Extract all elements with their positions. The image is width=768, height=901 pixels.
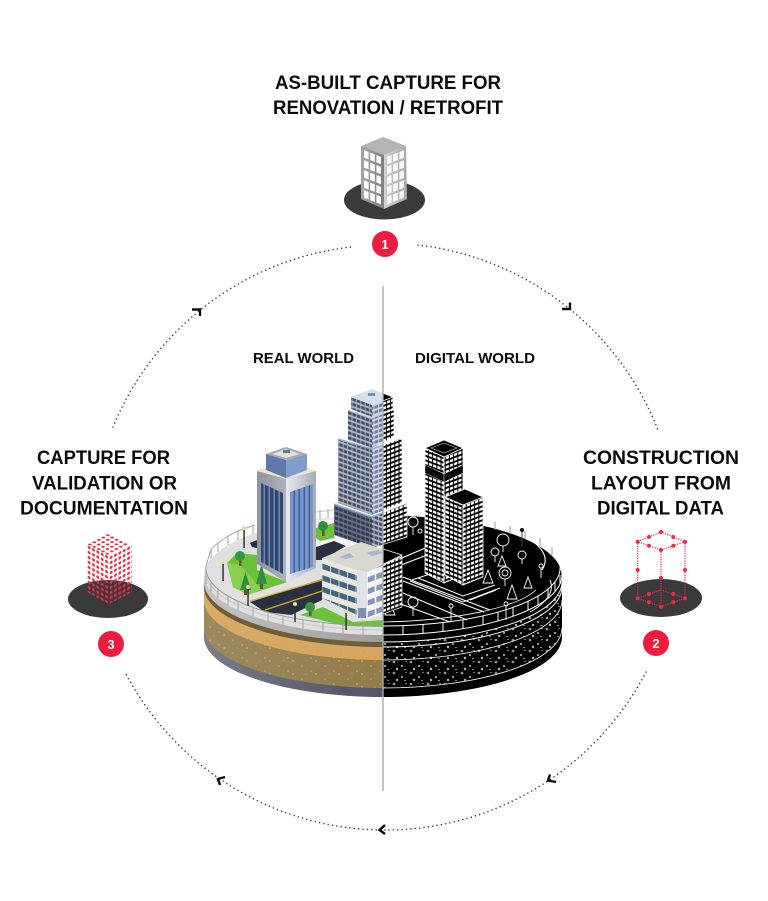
ground surface <box>204 515 382 635</box>
illustration: digital world half of city disc <box>384 394 562 697</box>
badge 3: 3 <box>107 637 115 652</box>
illustration: real world half of city disc <box>204 389 382 697</box>
badge 1: 1 <box>381 237 389 252</box>
heading: capture for validation: CAPTURE FOR <box>37 447 170 469</box>
heading: construction layout: DIGITAL DATA <box>597 498 724 520</box>
trees <box>235 521 328 616</box>
title: as-built capture <box>273 72 503 119</box>
park lawn left <box>227 553 287 595</box>
road back left <box>250 540 257 548</box>
fence digital <box>383 566 560 635</box>
office building digital <box>384 548 403 614</box>
office building real <box>322 542 382 620</box>
heading: capture for validation: VALIDATION OR <box>32 472 177 494</box>
fence <box>206 509 383 635</box>
pavement base digital <box>410 578 500 602</box>
lamp digital <box>520 528 524 547</box>
road front <box>250 579 322 615</box>
badge 3 <box>98 631 124 657</box>
heading: construction layout: LAYOUT FROM <box>591 472 731 494</box>
tower center real <box>334 389 382 547</box>
icon: grey building on dark disc <box>344 137 425 220</box>
badge 2 <box>643 630 669 656</box>
arrow: top left <box>192 310 200 316</box>
title: as-built capture: RENOVATION / RETROFIT <box>273 97 503 119</box>
arrow: left lower <box>218 777 225 785</box>
lawn shade <box>227 563 262 595</box>
soil layers <box>204 576 382 697</box>
divider line between real and digital <box>382 286 384 791</box>
icon: point cloud cube on dark disc <box>68 532 148 618</box>
heading: construction layout: CONSTRUCTION <box>583 447 739 469</box>
title: as-built capture: AS-BUILT CAPTURE FOR <box>275 72 501 94</box>
heading: capture for validation <box>20 447 188 520</box>
wireframe soil <box>384 580 562 697</box>
lawn back <box>316 523 334 541</box>
road lines <box>383 534 551 622</box>
badge 2: 2 <box>652 636 660 651</box>
heading: construction layout <box>583 447 739 520</box>
ground surface <box>384 516 562 636</box>
dotted cycle arcs <box>113 245 658 830</box>
label: real world: REAL WORLD <box>253 350 354 367</box>
tower digital back <box>425 440 463 583</box>
icon: wireframe cube on dark disc <box>620 530 702 617</box>
back fence posts <box>495 522 552 555</box>
lawn front <box>300 607 383 627</box>
tower digital front <box>445 489 483 585</box>
tower center digital <box>384 394 408 545</box>
road back <box>316 541 346 560</box>
lamps <box>221 526 348 630</box>
road markings <box>250 580 322 610</box>
arrow: bottom <box>380 825 385 834</box>
arrow: top right <box>562 302 570 309</box>
badge 1 <box>372 231 398 257</box>
back white zone <box>316 515 382 550</box>
arrow: right lower <box>548 774 556 782</box>
tower left real <box>257 447 316 582</box>
heading: capture for validation: DOCUMENTATION <box>20 498 188 520</box>
wireframe trees <box>385 517 543 622</box>
label: digital world: DIGITAL WORLD <box>415 350 535 367</box>
